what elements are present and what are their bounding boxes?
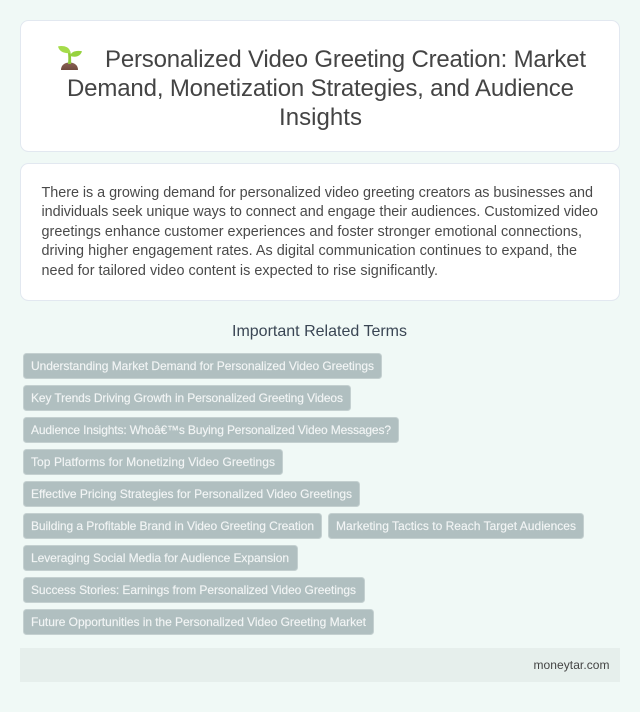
tag 2: Key Trends Driving Growth in Personalized Greeting Videos bbox=[31, 391, 343, 405]
summary text: There is a growing demand for personalized video greeting creators as businesses and bbox=[42, 185, 593, 201]
tag 5: Effective Pricing Strategies for Personalized Video Greetings bbox=[31, 487, 352, 501]
tag 4: Top Platforms for Monetizing Video Greetings bbox=[31, 455, 275, 469]
panel: summary card bbox=[20, 164, 620, 300]
tag 5 bbox=[24, 482, 360, 506]
title: Personalized Video Greeting Creation: Market bbox=[105, 46, 586, 73]
title: Insights bbox=[279, 104, 362, 131]
tag 3: Audience Insights: Whoâ€™s Buying Personalized Video Messages? bbox=[31, 423, 391, 437]
tag 7: Marketing Tactics to Reach Target Audiences bbox=[336, 519, 576, 533]
tag 4 bbox=[24, 450, 282, 474]
tag 10 bbox=[24, 610, 374, 634]
tag 6: Building a Profitable Brand in Video Greeting Creation bbox=[31, 519, 314, 533]
icon: seedling bbox=[58, 46, 82, 70]
summary text: need for tailored video content is expected to rise significantly. bbox=[42, 263, 438, 279]
footer bbox=[20, 648, 620, 682]
tag 1 bbox=[24, 354, 382, 378]
tag 10: Future Opportunities in the Personalized Video Greeting Market bbox=[31, 615, 367, 629]
tag 9 bbox=[24, 578, 364, 602]
title bbox=[67, 46, 586, 131]
tag 6 bbox=[24, 514, 322, 538]
tag 3 bbox=[24, 418, 398, 442]
tag 7 bbox=[328, 514, 584, 538]
footer source text: moneytar.com bbox=[534, 658, 610, 672]
title: Demand, Monetization Strategies, and Audience bbox=[67, 75, 574, 102]
tag 2 bbox=[24, 386, 350, 410]
tag 8: Leveraging Social Media for Audience Expansion bbox=[31, 551, 289, 565]
summary text: driving higher engagement rates. As digital communication continues to expand, the bbox=[42, 243, 577, 259]
tag 1: Understanding Market Demand for Personalized Video Greetings bbox=[31, 359, 374, 373]
tag 9: Success Stories: Earnings from Personalized Video Greetings bbox=[31, 583, 356, 597]
panel: title card bbox=[20, 20, 620, 152]
summary text bbox=[42, 185, 598, 279]
heading: important related terms: Important Related Terms bbox=[232, 323, 407, 340]
panel: related term tags bbox=[24, 354, 584, 634]
tag 8 bbox=[24, 546, 298, 570]
summary text: individuals seek unique ways to connect and engage their audiences. Customized video bbox=[42, 204, 598, 220]
summary text: greetings enhance customer experiences and foster stronger emotional connections, bbox=[42, 224, 582, 240]
